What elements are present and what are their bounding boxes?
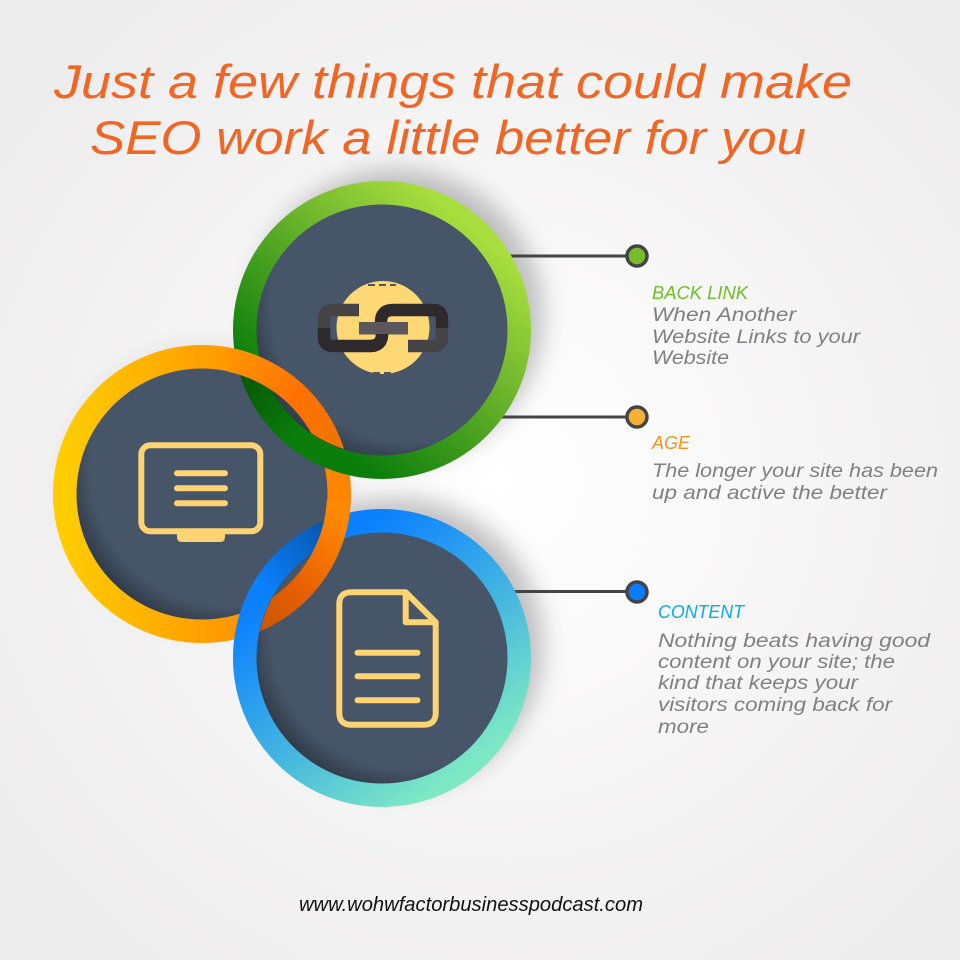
text block: back link: BACK LINK <box>652 282 750 303</box>
text block: content: Nothing beats having good <box>658 631 932 652</box>
text block: content <box>658 601 932 738</box>
text block: content: kind that keeps your <box>658 673 859 694</box>
text block: back link: Website <box>652 348 729 369</box>
circle shadows <box>62 170 543 790</box>
footer url: www.wohwfactorbusinesspodcast.com <box>299 894 643 916</box>
text block: age: up and active the better <box>652 483 888 504</box>
circle: back link <box>245 193 519 467</box>
text block: back link: Website Links to your <box>652 327 861 348</box>
circle: age <box>65 357 339 631</box>
text block: content: content on your site; the <box>658 652 895 673</box>
text block: back link: When Another <box>652 305 797 326</box>
icon: chain link <box>324 281 442 374</box>
title <box>53 55 852 164</box>
overlap: orange ring over green ring <box>228 347 344 449</box>
connector: age <box>495 407 647 427</box>
text block: age: AGE <box>651 432 691 453</box>
circle: content <box>245 521 519 795</box>
text block: age <box>651 432 938 504</box>
overlap shading on rings <box>240 375 324 589</box>
text block: age: The longer your site has been <box>652 461 938 482</box>
icon: document <box>339 592 436 725</box>
text block: content: more <box>658 717 709 738</box>
text block: content: visitors coming back for <box>658 695 893 716</box>
text block: back link <box>652 282 861 369</box>
overlap: orange ring over blue ring <box>260 500 351 632</box>
connector: content <box>510 582 647 602</box>
connector: back link <box>505 246 647 266</box>
icon: monitor <box>141 445 260 542</box>
text block: content: CONTENT <box>658 601 746 622</box>
title: Just a few things that could make <box>53 55 852 108</box>
title: SEO work a little better for you <box>90 111 806 164</box>
